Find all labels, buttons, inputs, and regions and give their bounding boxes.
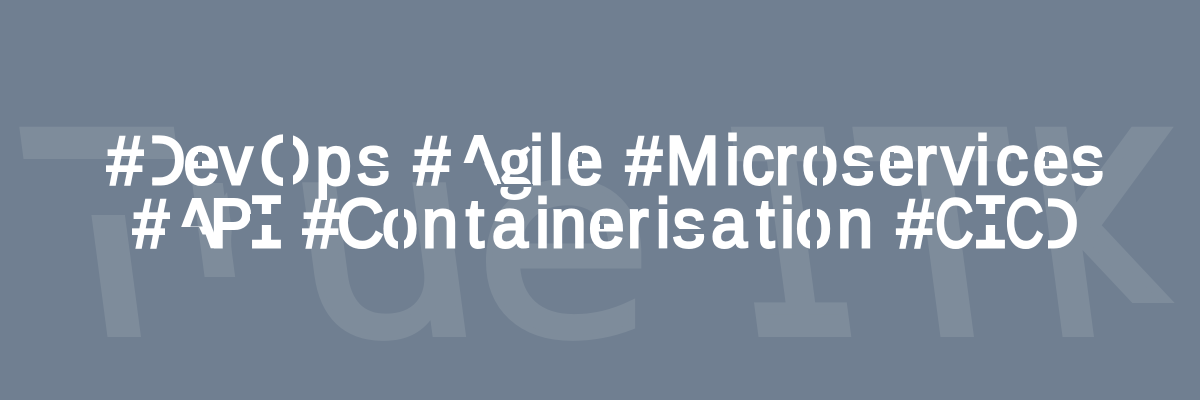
- tag: Agile: ile: [529, 123, 603, 199]
- tag: CICD: I: [971, 183, 1010, 264]
- tag: API: I: [247, 183, 286, 264]
- tag: CICD: #: [897, 186, 933, 262]
- tag: API: [132, 195, 281, 249]
- tag: CICD: C: [1005, 186, 1044, 262]
- tag: Microservices: #Microservices: [626, 123, 1104, 199]
- watermark: T: T: [851, 79, 1038, 396]
- tag: DevOps: #: [107, 123, 143, 199]
- tag: Agile: A: [457, 123, 500, 199]
- watermark: r: r: [157, 79, 313, 396]
- tag: CICD: [896, 195, 1077, 249]
- tag: DevOps: evOps: [184, 123, 390, 199]
- hashtag text: [106, 132, 1103, 249]
- watermark text: [20, 127, 1174, 341]
- tag: CICD: D: [1032, 186, 1078, 262]
- tag: Containerisation: #Containerisation: [303, 186, 873, 262]
- watermark: e: e: [473, 81, 654, 398]
- tag: Agile: g: [499, 124, 531, 199]
- watermark: T: T: [18, 79, 205, 396]
- tag: API: A: [175, 186, 218, 262]
- watermark: K: K: [1012, 78, 1200, 396]
- watermark: u: u: [267, 82, 498, 398]
- watermark: I: I: [709, 80, 875, 396]
- tag: CICD: C: [935, 186, 974, 262]
- tag: DevOps: [106, 134, 389, 200]
- tag: API: P: [210, 186, 253, 262]
- tag: DevOps: D: [139, 123, 186, 199]
- tag: Agile: #: [414, 123, 450, 199]
- tag: Agile: [412, 132, 602, 200]
- tag: API: #: [133, 186, 169, 262]
- banner: [20, 127, 1174, 341]
